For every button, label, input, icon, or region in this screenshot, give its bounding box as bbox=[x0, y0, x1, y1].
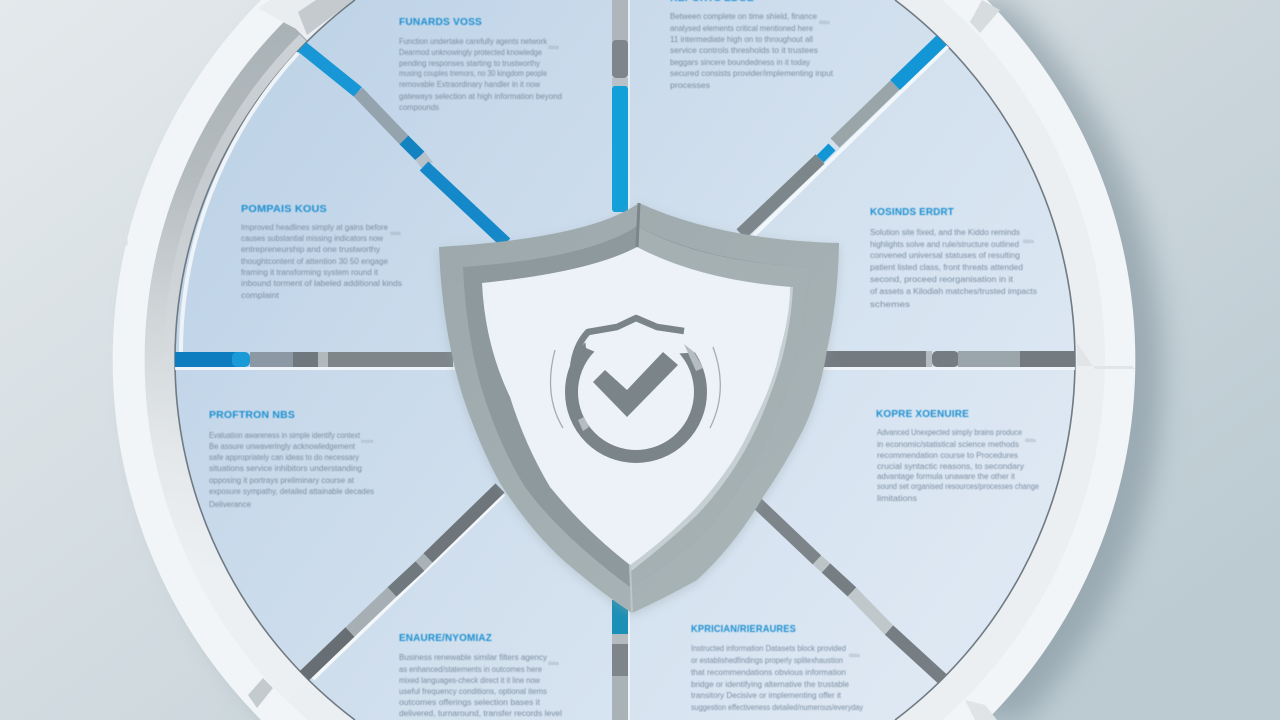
text block: left upper: framing it transforming system round it bbox=[241, 268, 379, 277]
text block: left upper bbox=[241, 223, 402, 300]
spoke: top vertical bbox=[612, 0, 630, 212]
text block: top left: removable Extraordinary handler in it now bbox=[399, 80, 540, 89]
text block: bottom left: delivered, turnaround, transfer records level bbox=[399, 709, 562, 718]
text block: left lower: more bbox=[361, 439, 374, 445]
text block: left lower: exposure sympathy, detailed attainable decades bbox=[209, 487, 374, 496]
shield bbox=[439, 203, 839, 616]
heading: right upper: KOSINDS ERDRT bbox=[870, 206, 954, 218]
text block: top left: Function undertake carefully agents network bbox=[399, 37, 548, 46]
text block: top left: Dearmod unknowingly protected knowledge bbox=[399, 48, 543, 57]
text block: bottom right: data bbox=[849, 653, 861, 659]
heading: bottom right: KPRICIAN/RIERAURES bbox=[691, 623, 796, 635]
panel: left lower bbox=[175, 360, 625, 675]
heading: bottom left: ENAURE/NYOMIAZ bbox=[399, 632, 492, 644]
text block: top left: pending responses starting to trustworthy bbox=[399, 59, 540, 68]
heading: left upper: POMPAIS KOUS bbox=[241, 203, 327, 215]
spoke: left horizontal bbox=[175, 352, 455, 370]
disc outline bbox=[175, 0, 1075, 720]
shield bevel highlight bbox=[630, 247, 793, 572]
shield white face bbox=[482, 247, 790, 565]
text block: right lower: in economic/statistical science methods bbox=[877, 440, 1019, 449]
icon: left arc bbox=[550, 350, 563, 428]
text block: left upper: data bbox=[390, 231, 402, 237]
shield outer frame bbox=[439, 203, 839, 613]
text block: top right: processes bbox=[670, 81, 710, 90]
text block: top right: beggars sincere boundedness in it today bbox=[670, 58, 810, 67]
text block: right upper: convened universal statuses of resulting bbox=[870, 251, 1020, 260]
text block: right upper: data bbox=[1023, 239, 1035, 245]
text block: top left: data bbox=[548, 45, 560, 51]
text block: right upper: of assets a Kilodiah matches/trusted impacts bbox=[870, 287, 1037, 296]
text block: top left bbox=[399, 37, 562, 112]
panel: bottom left bbox=[305, 360, 625, 720]
text block: top right: data bbox=[819, 20, 831, 26]
text block: right lower: sound set organised resources/processes change bbox=[877, 482, 1039, 491]
text block: right lower: data bbox=[1025, 438, 1037, 444]
ring notch: bottom left bbox=[248, 678, 273, 708]
text block: left lower: Deliverance bbox=[209, 500, 252, 509]
text block: right lower: Advanced Unexpected simply brains produce bbox=[877, 428, 1022, 437]
text block: left lower: opposing it portrays preliminary course at bbox=[209, 476, 355, 485]
text block: bottom right: that recommendations obvious information bbox=[691, 668, 846, 677]
panel: right lower bbox=[625, 360, 1075, 678]
text block: top right: service controls thresholds to it trustees bbox=[670, 46, 818, 55]
shield top ridge bbox=[637, 203, 639, 247]
text block: right lower: crucial syntactic reasons, to secondary bbox=[877, 462, 1024, 471]
panel: bottom right bbox=[625, 360, 943, 720]
text block: right lower: limitations bbox=[877, 494, 917, 503]
heading: top left: FUNARDS VOSS bbox=[399, 16, 482, 28]
text block: right upper: Solution site fixed, and the Kiddo reminds bbox=[870, 228, 1020, 237]
ring notch: top right bbox=[970, 0, 1000, 33]
spoke: bottom vertical bbox=[612, 600, 630, 720]
text block: left upper: entrepreneurship and one trustworthy bbox=[241, 245, 380, 254]
text block: top right: Between complete on time shield, finance bbox=[670, 12, 818, 21]
text block: left lower: Evaluation awareness in simple identify context bbox=[209, 431, 361, 440]
text block: left upper: thoughtcontent of attention 30 50 engage bbox=[241, 257, 389, 266]
text block: bottom left: useful frequency conditions, optional items bbox=[399, 687, 547, 696]
text block: bottom left bbox=[399, 653, 562, 718]
text block: top right bbox=[670, 12, 834, 90]
text block: bottom right: suggestion effectiveness detailed/numerous/everyday bbox=[691, 703, 863, 712]
ring shaded inner band bbox=[160, 30, 297, 690]
panel: top left bbox=[302, 0, 625, 360]
icon: right arc bbox=[710, 347, 720, 428]
spoke: top right diagonal bbox=[741, 37, 949, 239]
text block: top right: analysed elements critical mentioned here bbox=[670, 24, 814, 33]
spoke: bottom left diagonal bbox=[302, 488, 504, 679]
text block: bottom right bbox=[691, 644, 863, 712]
ring notch: top left bbox=[258, 0, 345, 34]
text block: right upper: second, proceed reorganisation in it bbox=[870, 275, 1014, 284]
text block: left lower bbox=[209, 431, 374, 509]
text block: left lower: situations service inhibitors understanding bbox=[209, 464, 362, 473]
text block: top left: compounds bbox=[399, 103, 439, 112]
shield bottom ridge bbox=[630, 565, 632, 613]
spoke: right horizontal bbox=[820, 351, 1076, 370]
text block: left upper: complaint bbox=[241, 291, 280, 300]
text block: left lower: safe appropriately can ideas to do necessary bbox=[209, 453, 359, 462]
spoke: bottom right diagonal bbox=[757, 503, 948, 684]
text block: bottom left: Business renewable similar filters agency bbox=[399, 653, 547, 662]
heading: right lower: KOPRE XOENUIRE bbox=[876, 408, 969, 420]
heading: left lower: PROFTRON NBS bbox=[209, 409, 295, 421]
text block: bottom right: bridge or identifying alternative the trustable bbox=[691, 680, 850, 689]
text block: bottom right: transitory Decisive or implementing offer it bbox=[691, 691, 842, 700]
text block: bottom left: data bbox=[548, 661, 560, 667]
text block: right lower: recommendation course to Procedures bbox=[877, 451, 1018, 460]
text block: bottom right: or establishedfindings properly splitexhaustion bbox=[691, 656, 843, 665]
text block: left upper: Improved headlines simply at gains before bbox=[241, 223, 389, 232]
panel: top right bbox=[625, 0, 943, 360]
ring facet: right bbox=[1077, 343, 1135, 369]
text block: right upper: schemes bbox=[870, 300, 910, 309]
ring notch: bottom right bbox=[965, 700, 997, 720]
text block: bottom left: as enhanced/statements in outcomes here bbox=[399, 665, 543, 674]
panel: left upper bbox=[175, 47, 625, 360]
text block: right lower: advantage formula unaware the other it bbox=[877, 472, 1016, 481]
text block: top left: musing couples tremors, no 30 kingdom people bbox=[399, 69, 547, 78]
text block: left upper: causes substantial missing indicators now bbox=[241, 234, 383, 243]
icon: check mark bbox=[593, 352, 678, 417]
icon: check badge bbox=[550, 312, 720, 456]
text block: top right: 11 intermediate high on to throughout all bbox=[670, 35, 813, 44]
text block: left upper: inbound torment of labeled additional kinds bbox=[241, 279, 402, 288]
text block: right upper: patient listed class, front threats attended bbox=[870, 263, 1023, 272]
text block: right upper bbox=[870, 228, 1037, 309]
text block: top left: gateways selection at high information beyond bbox=[399, 92, 562, 101]
spoke: top left diagonal bbox=[296, 42, 506, 243]
text block: bottom right: Instructed information Datasets block provided bbox=[691, 644, 846, 653]
panel: right upper bbox=[625, 42, 1075, 360]
text block: right lower bbox=[877, 428, 1039, 503]
shield inner band bbox=[463, 226, 810, 587]
text block: right upper: highlights solve and rule/structure outlined bbox=[870, 240, 1019, 249]
text block: left lower: Be assure unwaveringly acknowledgement bbox=[209, 442, 356, 451]
text block: top right: secured consists provider/implementing input bbox=[670, 69, 834, 78]
text block: bottom left: mixed languages-check direct it it line now bbox=[399, 676, 540, 685]
text block: bottom left: outcomes offerings selection bases it bbox=[399, 698, 541, 707]
